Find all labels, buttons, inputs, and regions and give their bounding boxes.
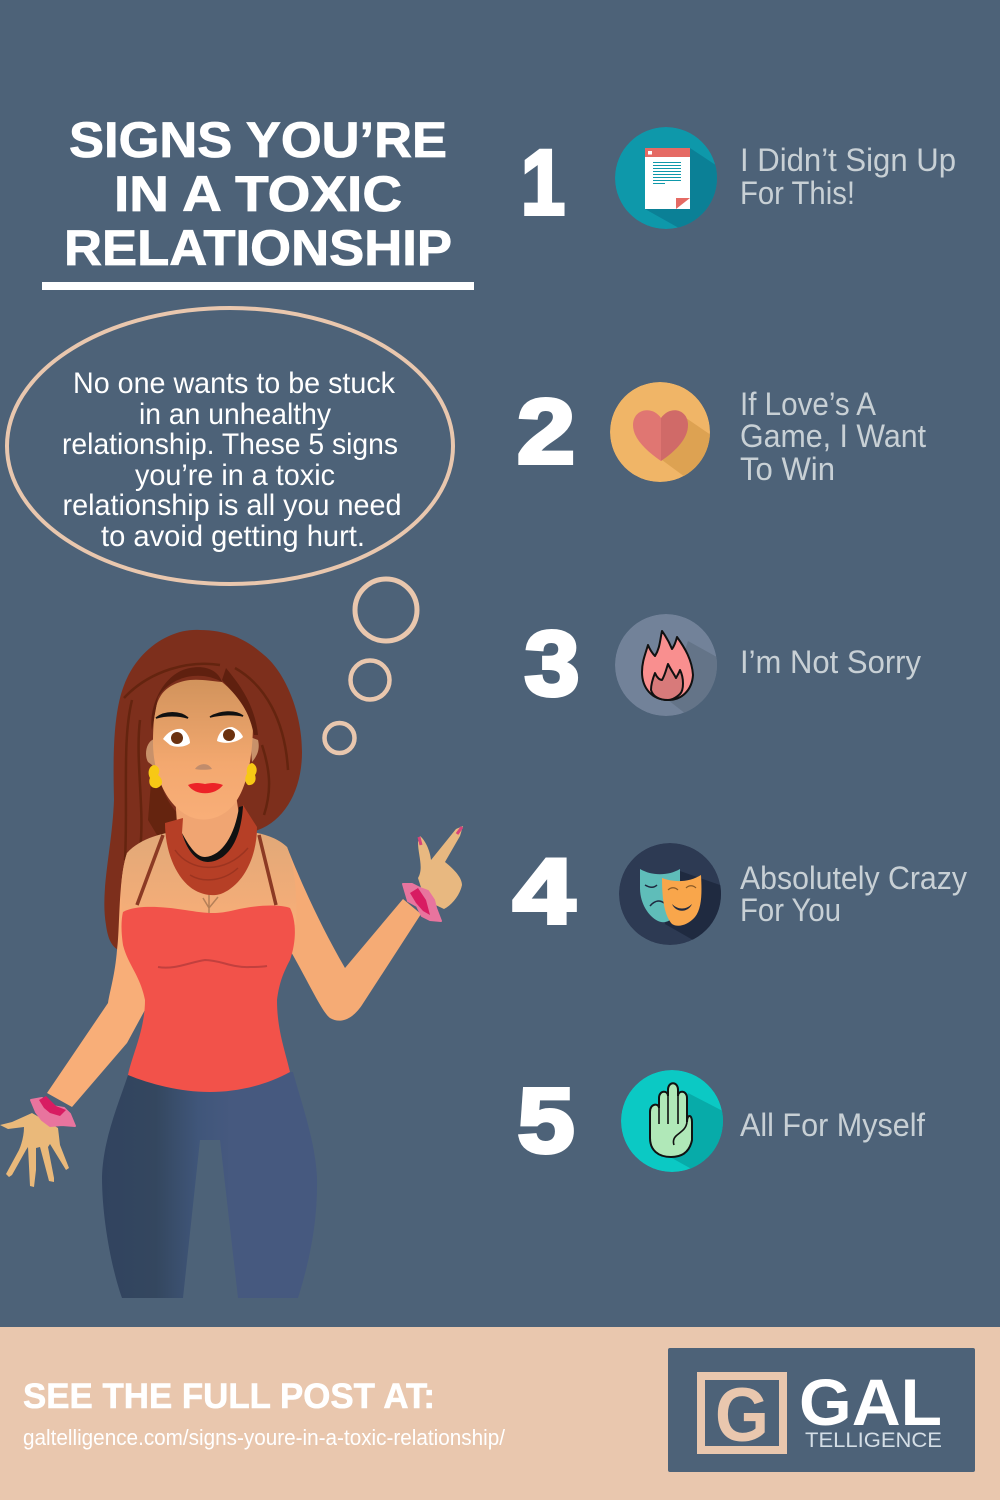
nose [195, 764, 212, 770]
top crease [158, 960, 267, 968]
thought bubble text: relationship is all you need [62, 489, 402, 522]
label 1 [740, 142, 956, 211]
title: SIGNS YOU’RE [69, 112, 447, 168]
hair shadow behind neck [148, 770, 185, 840]
label 1: For This! [740, 175, 855, 211]
right hand nails [419, 827, 462, 845]
hair strands [124, 664, 288, 860]
left arm [47, 850, 170, 1107]
left scrunchie [31, 1098, 75, 1126]
ears [146, 737, 259, 768]
footer url: galtelligence.com/signs-youre-in-a-toxic-relationship/ [23, 1425, 506, 1450]
label 4: For You [740, 892, 841, 928]
eyes [163, 729, 190, 747]
logo G mark: G [715, 1373, 769, 1458]
label 5: All For Myself [740, 1107, 925, 1143]
icon: heart [610, 382, 710, 482]
earrings [149, 763, 257, 788]
thought bubble text: No one wants to be stuck [73, 367, 396, 400]
hair parting shadows [151, 667, 222, 730]
logo [668, 1348, 975, 1472]
number 1: 1 [521, 132, 565, 234]
title: IN A TOXIC [114, 166, 402, 222]
right hand [418, 826, 463, 909]
icon: flame [615, 614, 717, 716]
label 2: If Love’s A [740, 386, 877, 422]
black neck shadow [182, 806, 243, 862]
scarf folds [175, 848, 248, 880]
top straps [137, 835, 276, 905]
title: RELATIONSHIP [64, 220, 452, 276]
logo wordmark: TELLIGENCE [805, 1429, 942, 1452]
footer band [0, 1327, 1000, 1500]
label 4 [740, 860, 967, 928]
thought bubble text: you’re in a toxic [135, 459, 335, 492]
number 2: 2 [517, 381, 575, 483]
number 4: 4 [513, 841, 575, 943]
face [153, 680, 253, 820]
thought bubble [7, 308, 453, 584]
thought bubble text: to avoid getting hurt. [101, 520, 365, 553]
necklace [203, 893, 218, 922]
logo wordmark: GAL [799, 1365, 942, 1439]
label 2: To Win [740, 451, 835, 487]
label 4: Absolutely Crazy [740, 860, 967, 896]
label 2: Game, I Want [740, 418, 926, 454]
lips [188, 783, 223, 793]
thought bubble text [62, 367, 402, 553]
label 3: I’m Not Sorry [740, 644, 921, 680]
icon: theatre masks [619, 843, 721, 945]
thought bubble text: in an unhealthy [139, 398, 331, 431]
right scrunchie [403, 884, 441, 921]
chest [121, 830, 296, 925]
thought bubble text: relationship. These 5 signs [62, 428, 398, 461]
scarf [165, 805, 257, 895]
title underline [42, 282, 474, 290]
icon: raised hand [621, 1070, 723, 1172]
label 1: I Didn’t Sign Up [740, 142, 956, 178]
jeans [102, 1072, 317, 1298]
left hand [0, 1113, 69, 1187]
red top [122, 906, 295, 1092]
neck [175, 795, 242, 865]
label 2 [740, 386, 926, 487]
number 5: 5 [518, 1070, 574, 1172]
icon: document [615, 127, 717, 229]
thought circles [324, 579, 417, 753]
right arm [250, 835, 421, 1021]
footer heading: SEE THE FULL POST AT: [23, 1377, 435, 1416]
woman illustration [0, 630, 463, 1298]
hair back [104, 630, 302, 950]
title [64, 112, 452, 276]
eyebrows [156, 713, 188, 718]
number 3: 3 [524, 613, 580, 715]
